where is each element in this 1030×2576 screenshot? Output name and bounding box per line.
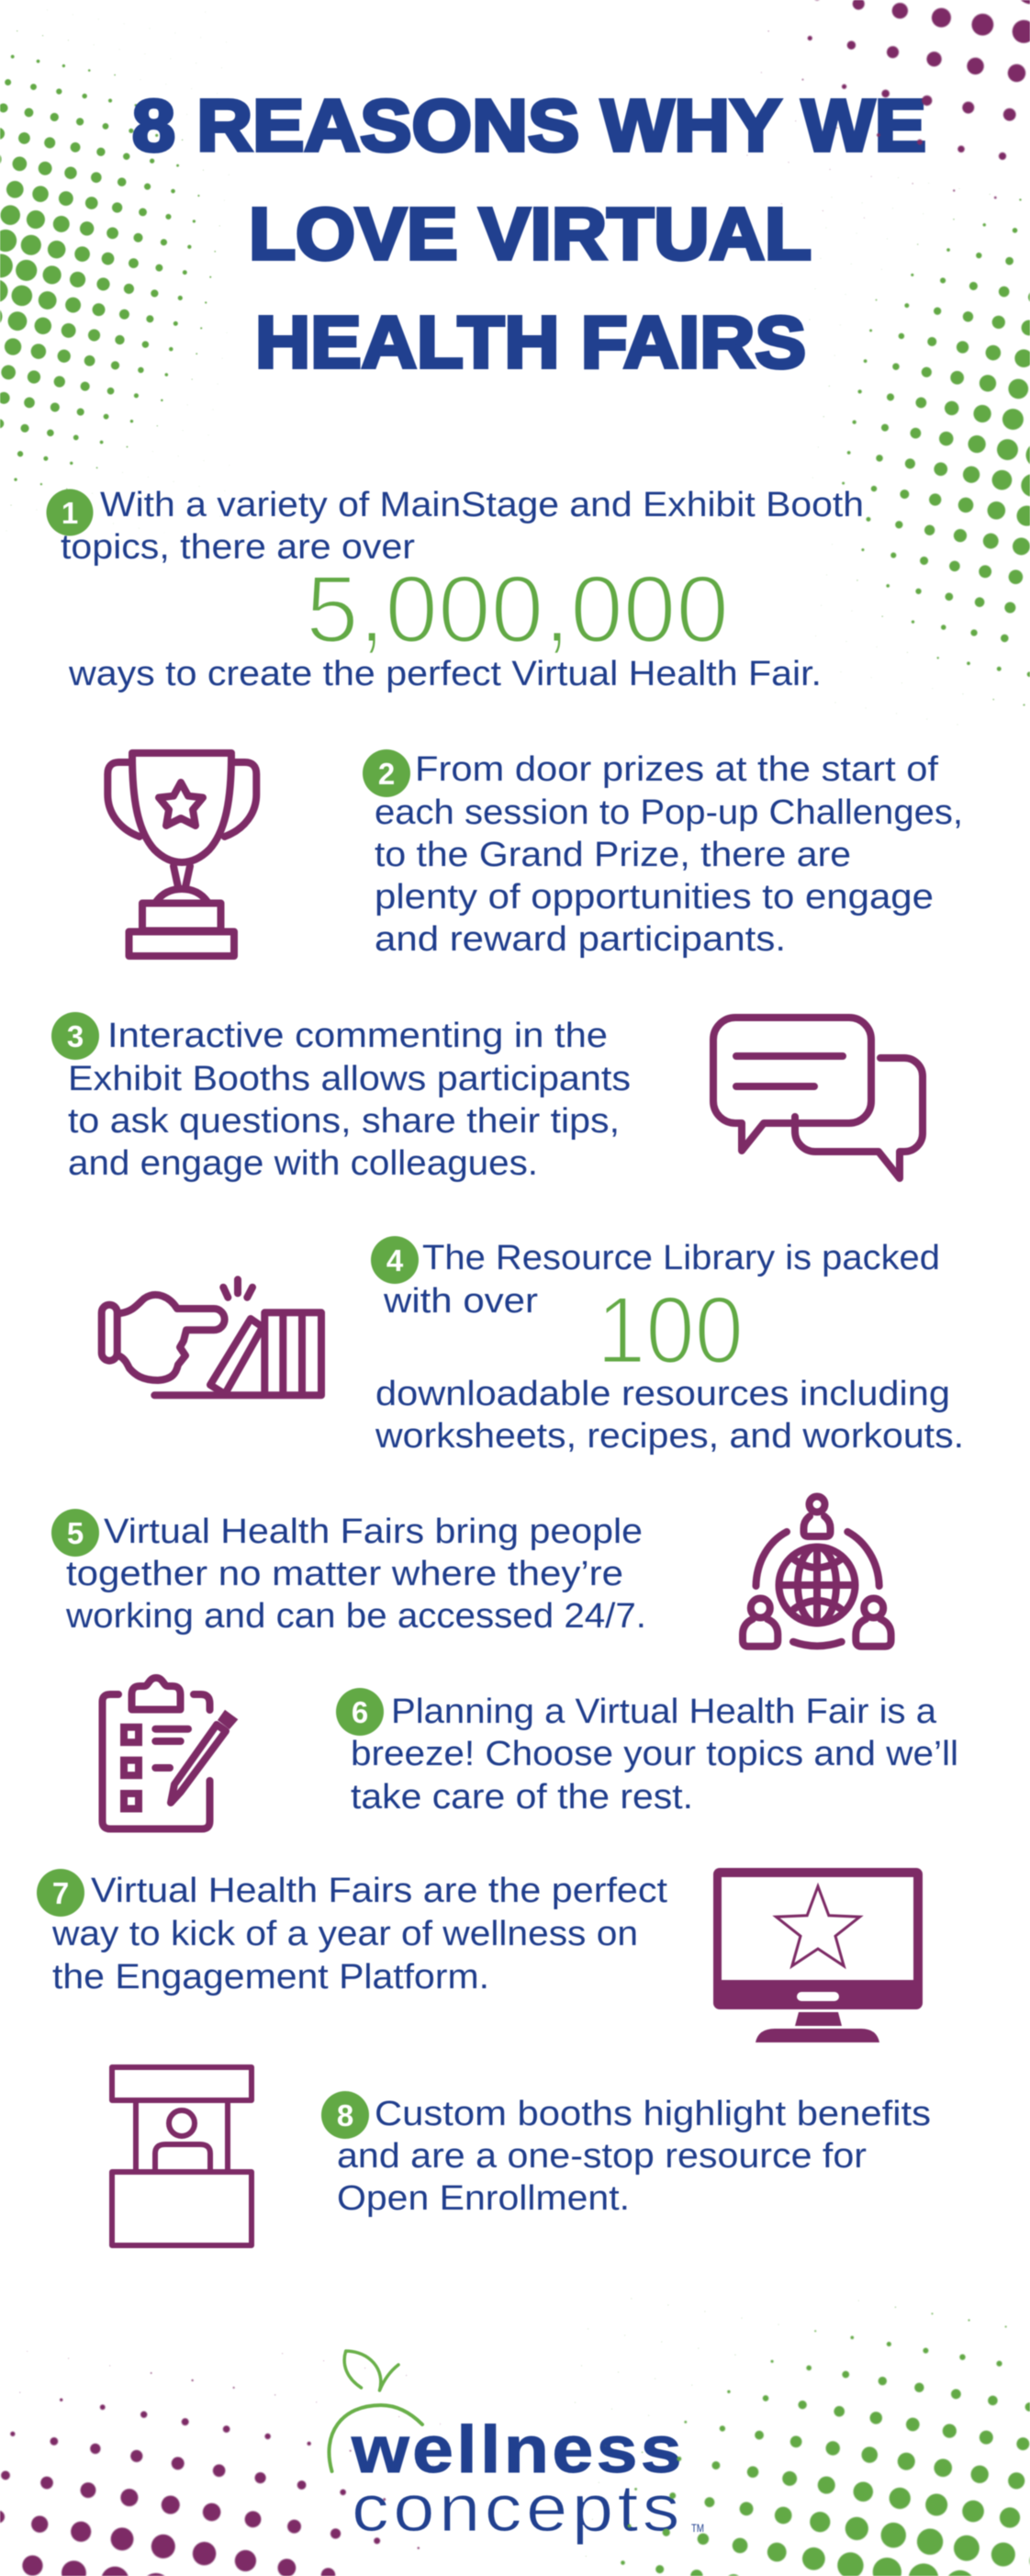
icon: trophy <box>107 753 256 956</box>
reason 1 text block: 1 <box>62 496 78 530</box>
reason 7 text block: 7 <box>52 1876 69 1910</box>
reason 7 text block: Virtual Health Fairs are the perfect <box>91 1872 667 1910</box>
reason 3 text block: Interactive commenting in the <box>107 1017 608 1055</box>
logo: wellness concepts: wellness <box>351 2413 685 2487</box>
reason 3 text block: to ask questions, share their tips, <box>68 1102 620 1141</box>
halftone dots: bottom-left purple <box>0 2351 441 2576</box>
reason 2 text block <box>363 749 963 959</box>
reason 6 text block <box>336 1688 958 1817</box>
reason 8 text block <box>321 2091 931 2218</box>
reason 6 text block: 6 <box>352 1695 368 1729</box>
reason 1 text block: topics, there are over <box>61 528 415 567</box>
reason 5 text block: Virtual Health Fairs bring people <box>104 1513 643 1551</box>
reason 3 text block: 3 <box>67 1019 84 1053</box>
icon: computer monitor with star <box>713 1868 923 2042</box>
reason 4 text block: downloadable resources including <box>375 1375 950 1413</box>
icon: hand pointing at books <box>102 1279 321 1395</box>
halftone dots: bottom-right green <box>569 2296 1030 2576</box>
icon: chat bubbles <box>713 1018 923 1178</box>
reason 2 text block: and reward participants. <box>375 920 786 959</box>
logo: wellness concepts <box>329 2351 704 2546</box>
reason 4 text block: worksheets, recipes, and workouts. <box>375 1417 964 1456</box>
reason 3 text block <box>51 1012 631 1183</box>
reason 4 text block: 4 <box>386 1243 404 1277</box>
icon: clipboard checklist <box>103 1678 238 1829</box>
reason 7 text block: way to kick of a year of wellness on <box>51 1915 638 1953</box>
halftone dots: right green <box>808 174 1030 726</box>
reason 2 text block: to the Grand Prize, there are <box>375 836 851 874</box>
title: LOVE VIRTUAL <box>249 193 812 275</box>
reason 4 text block: 100 <box>597 1277 744 1384</box>
reason 1 text block: ways to create the perfect Virtual Health Fair. <box>68 655 822 693</box>
reason 4 text block: with over <box>383 1282 538 1321</box>
reason 3 text block: Exhibit Booths allows participants <box>68 1060 631 1098</box>
reason 1 text block <box>46 486 864 693</box>
reason 5 text block: working and can be accessed 24/7. <box>65 1597 646 1636</box>
icon: people around globe <box>743 1497 891 1647</box>
logo: wellness concepts: TM <box>691 2522 704 2535</box>
reason 8 text block: Custom booths highlight benefits <box>375 2095 931 2133</box>
reason 4 text block <box>371 1236 964 1456</box>
reason 4 text block: The Resource Library is packed <box>422 1239 940 1277</box>
reason 5 text block <box>51 1509 646 1636</box>
reason 5 text block: 5 <box>67 1516 84 1550</box>
title: HEALTH FAIRS <box>255 301 806 383</box>
reason 8 text block: and are a one-stop resource for <box>337 2137 867 2176</box>
reason 6 text block: Planning a Virtual Health Fair is a <box>391 1693 937 1731</box>
icon: exhibit booth with person <box>112 2067 252 2245</box>
reason 8 text block: 8 <box>337 2098 353 2132</box>
reason 2 text block: plenty of opportunities to engage <box>375 878 934 917</box>
logo: wellness concepts: concepts <box>352 2472 684 2546</box>
halftone dots: top-right purple <box>744 0 1030 220</box>
reason 8 text block: Open Enrollment. <box>337 2179 630 2218</box>
reason 5 text block: together no matter where they’re <box>66 1555 623 1593</box>
title: 8 REASONS WHY WE <box>132 84 926 166</box>
reason 1 text block: 5,000,000 <box>306 557 729 663</box>
title <box>132 84 926 383</box>
reason 1 text block: With a variety of MainStage and Exhibit Booth <box>100 486 864 524</box>
reason 2 text block: 2 <box>378 757 395 791</box>
reason 3 text block: and engage with colleagues. <box>68 1144 538 1183</box>
halftone dots: left green <box>0 9 230 533</box>
reason 7 text block <box>37 1869 667 1997</box>
reason 6 text block: take care of the rest. <box>351 1778 693 1817</box>
reason 2 text block: each session to Pop-up Challenges, <box>375 793 963 832</box>
reason 7 text block: the Engagement Platform. <box>52 1958 489 1997</box>
reason 2 text block: From door prizes at the start of <box>415 750 938 789</box>
reason 6 text block: breeze! Choose your topics and we’ll <box>351 1735 958 1773</box>
